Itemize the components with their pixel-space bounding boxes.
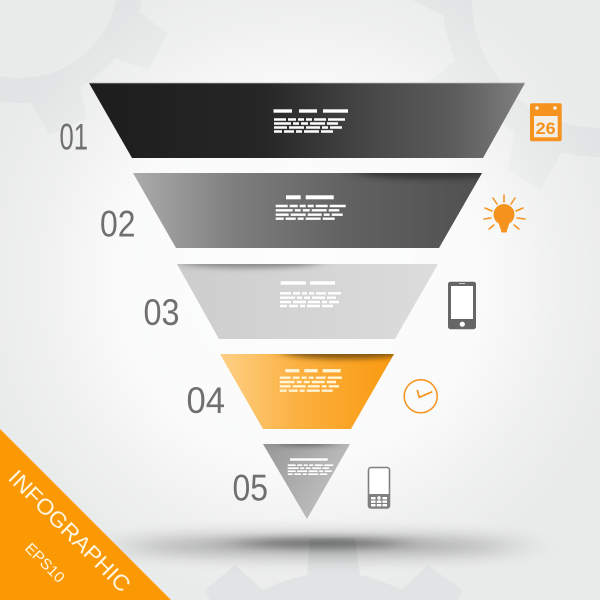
funnel shadow	[125, 535, 515, 557]
icon: smartphone	[448, 282, 476, 329]
funnel band 4	[220, 354, 394, 429]
band 1 text placeholder	[274, 109, 348, 132]
gear: top left	[0, 0, 168, 135]
number 02: 02	[100, 204, 136, 245]
icon: clock	[404, 380, 437, 413]
band 5 text placeholder	[288, 458, 334, 474]
number 03: 03	[144, 292, 180, 333]
gear: top right	[413, 0, 600, 190]
icon: mobile phone	[368, 468, 390, 508]
icon: light bulb	[484, 195, 525, 232]
band 2 text placeholder	[276, 195, 346, 219]
band 4 text placeholder	[280, 369, 342, 391]
funnel band 1	[89, 83, 525, 158]
funnel band 2	[133, 173, 482, 248]
corner ribbon	[0, 429, 171, 600]
number 01: 01	[60, 116, 88, 157]
funnel band 5	[263, 438, 350, 519]
funnel band 3	[177, 256, 438, 339]
gear: bottom	[205, 538, 462, 600]
icon: calendar: 26	[536, 119, 556, 138]
ribbon subtitle: EPS10	[21, 540, 68, 586]
icon: calendar	[530, 103, 562, 141]
band 3 text placeholder	[280, 281, 341, 306]
number 04: 04	[186, 380, 225, 421]
number 05: 05	[232, 468, 268, 509]
ribbon title: INFOGRAPHIC	[3, 465, 136, 597]
